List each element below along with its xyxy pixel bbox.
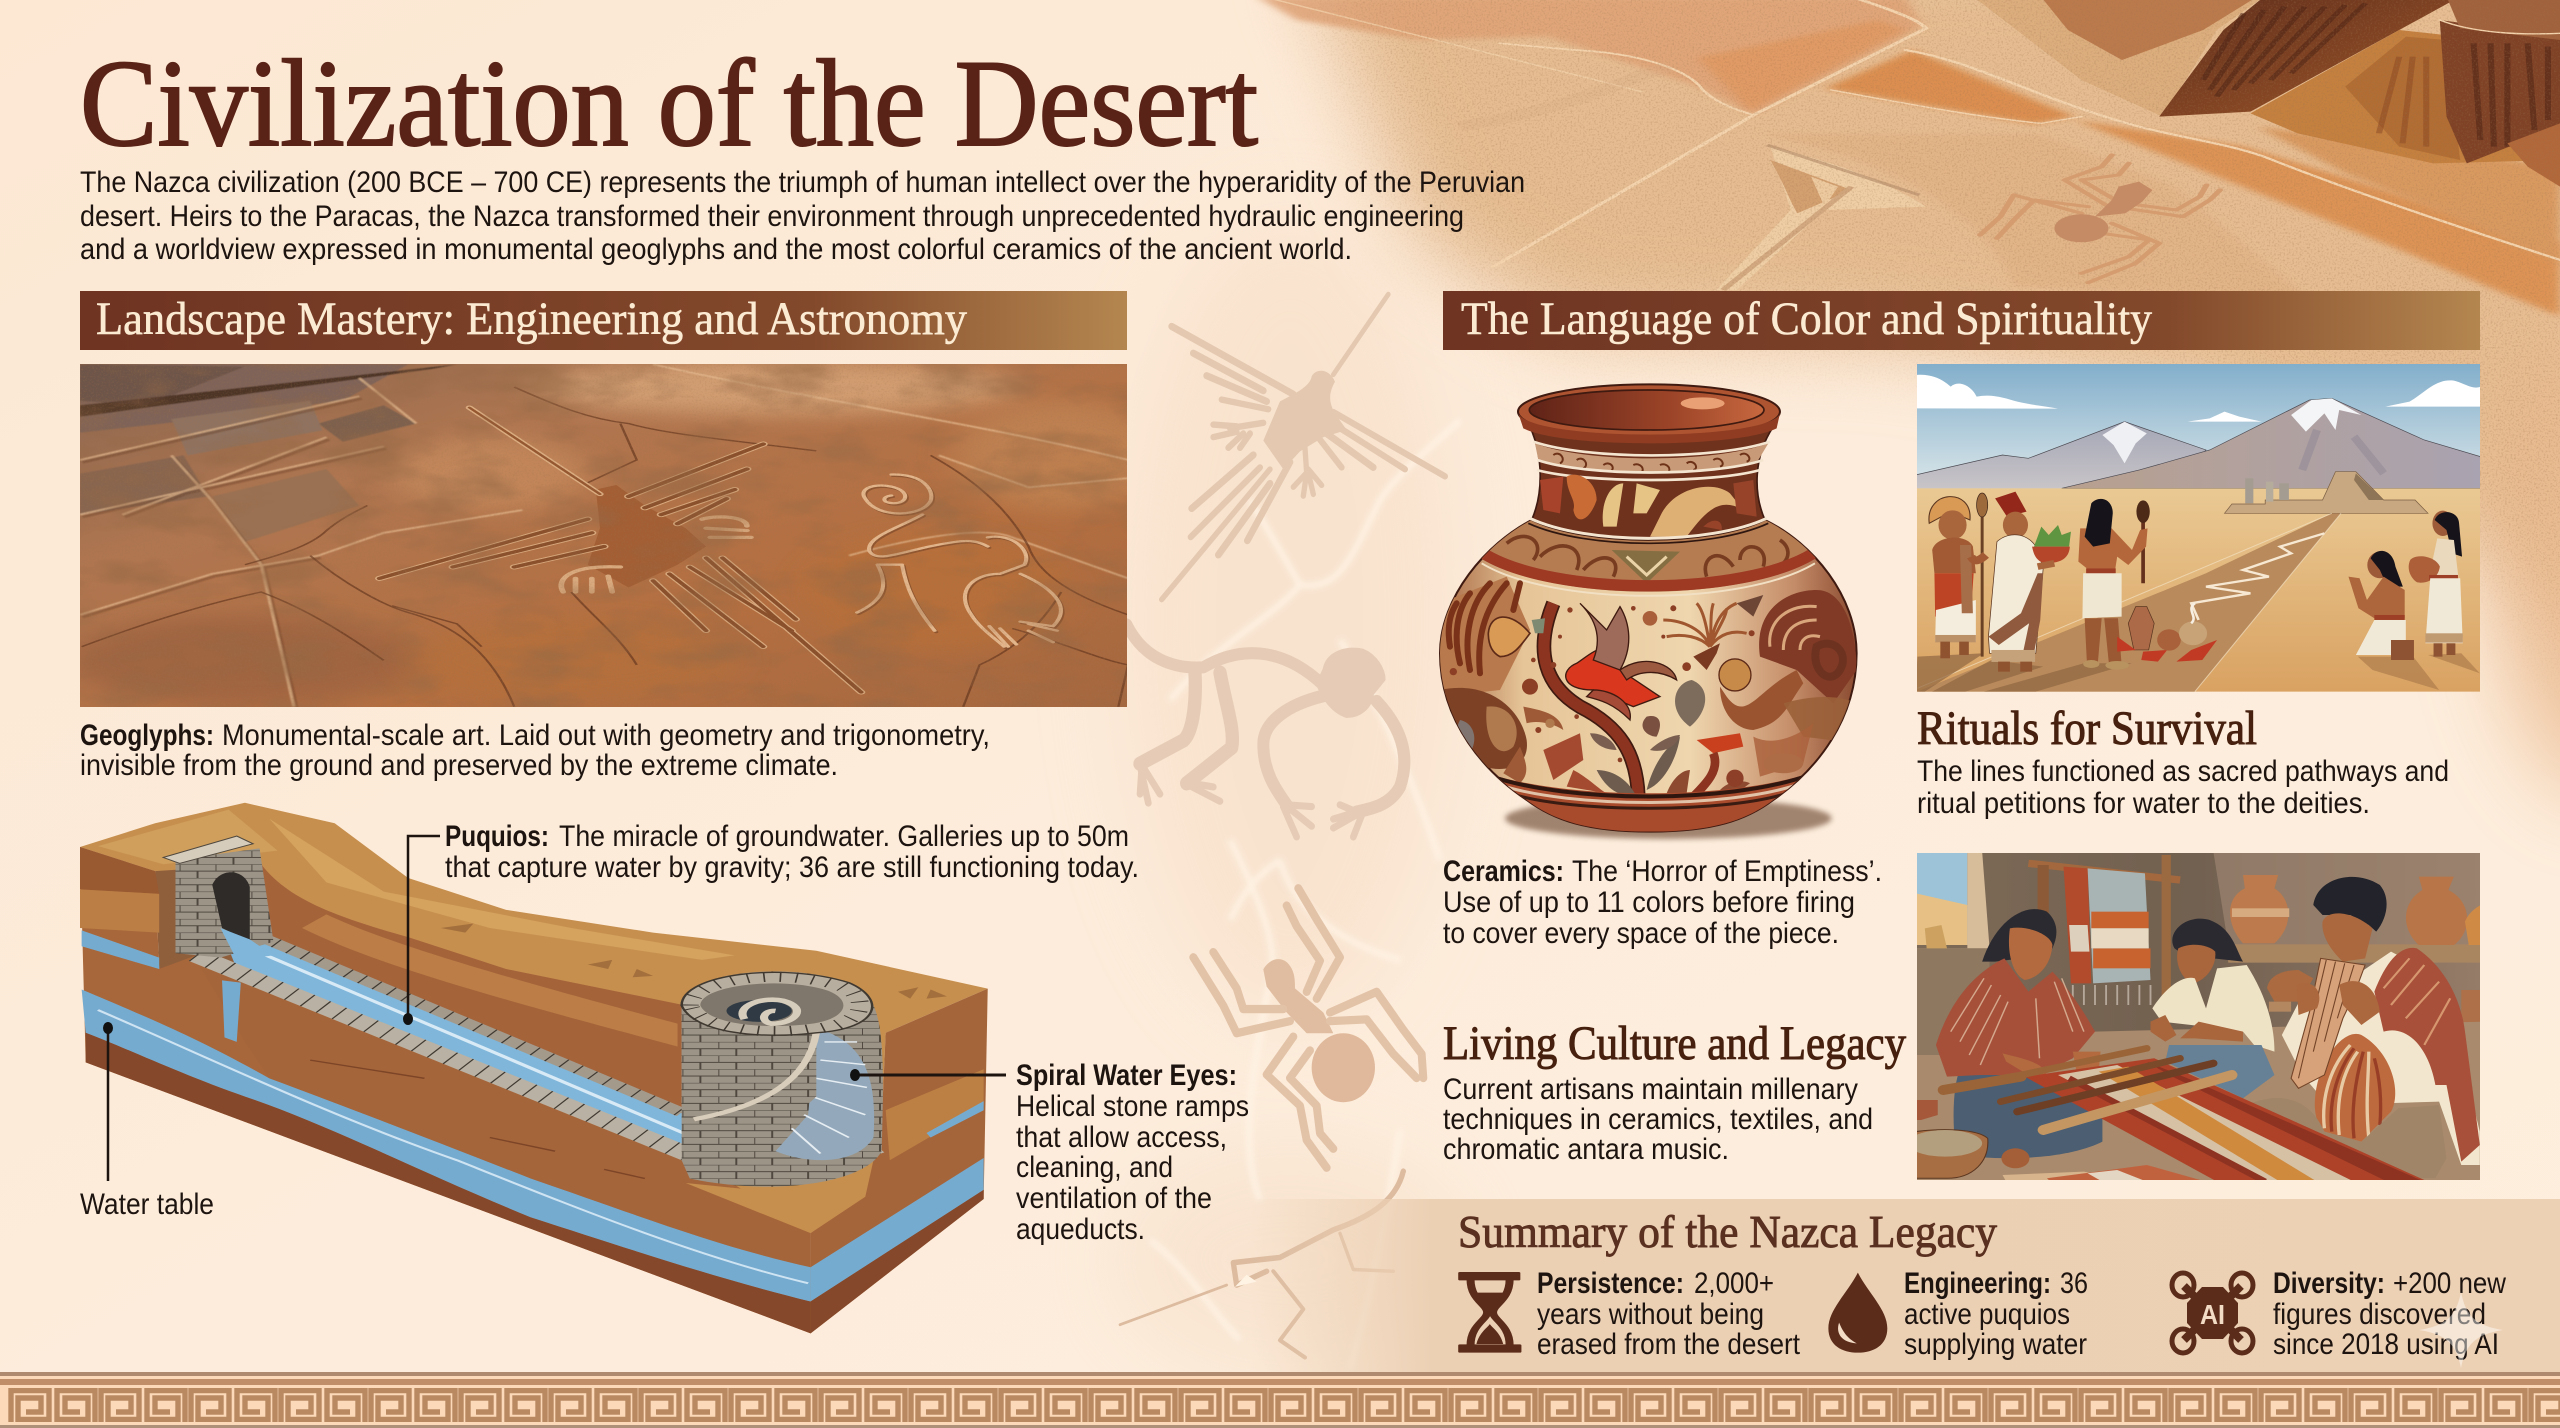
subheading and text: living culture: techniques in ceramics, textiles, and [1443,1103,1873,1136]
right soil face [811,989,988,1333]
panel: landscape mastery [65,291,1249,1333]
woman center [2150,919,2274,1098]
summary text: diversity: +200 new [2393,1267,2506,1300]
woman left [1936,909,2102,1168]
icon: AI: AI [2200,1299,2225,1330]
caption: ceramics: to cover every space of the piece. [1443,917,1839,950]
temple [2224,472,2428,513]
small painted motifs [1450,605,1755,762]
right creature [1759,590,1857,703]
background glyph: monkey [1127,625,1404,837]
callout: spiral water eyes: ventilation of the [1016,1182,1212,1215]
summary text: diversity [2273,1267,2506,1361]
floor rug [2002,1172,2139,1182]
summary text: engineering [1904,1267,2088,1361]
summary text: engineering: Engineering: [1904,1267,2051,1300]
foot band [1496,776,1803,832]
caption: ceramics: Use of up to 11 colors before firing [1443,886,1855,919]
stone channel walls [261,937,682,1112]
icon: sparkle watermark [2419,1292,2503,1368]
section heading: language of color: The Language of Color and Spirituality [1461,293,2152,345]
front soil face [80,847,811,1333]
caption: ceramics: Ceramics: [1443,855,1564,888]
summary text: persistence: 2,000+ [1694,1267,1774,1300]
icon: spider geoglyph on terrain [1980,155,2220,283]
subheading and text: living culture: Living Culture and Legacy [1443,1017,1906,1070]
image: ritual procession on the lines [1916,363,2482,692]
left creature [1440,577,1530,697]
caption: geoglyphs: Monumental-scale art. Laid out with geometry and trigonometry, [222,719,990,752]
subheading and text: rituals for survival [1917,702,2449,820]
loom sticks [1943,1048,2232,1130]
callout: water table [80,1022,214,1221]
image: artisans weaving and playing antara [1908,852,2482,1182]
callout: spiral water eyes: aqueducts. [1016,1213,1145,1246]
figure: man with raised club [2078,499,2150,670]
floor [1916,1022,2482,1182]
background: desert terrain, top right [1200,0,2560,800]
intro text: The Nazca civilization (200 BCE – 700 CE) represents the triumph of human intellect over the hyperaridity of the Peruvian [80,166,1525,199]
callout: puquios [403,820,1139,1025]
lower tan strata [686,1183,865,1233]
shelf with jars [2228,875,2482,1047]
summary text: persistence: years without being [1537,1298,1764,1331]
panel: summary of the Nazca legacy [1458,1206,2506,1368]
subheading and text: rituals for survival: The lines functioned as sacred pathways and [1917,755,2449,788]
section heading: language of color [1443,291,2480,350]
bowl and cup [1908,1100,1988,1178]
figure: priest with fan headdress [1929,493,1988,658]
title: Civilization of the Desert [80,35,1258,172]
icon: water drop [1828,1273,1887,1353]
summary heading: Summary of the Nazca Legacy [1458,1206,1997,1257]
spiral well [682,971,883,1187]
summary text: diversity: Diversity: [2273,1267,2385,1300]
subheading and text: rituals for survival: Rituals for Survival [1917,702,2257,755]
caption: geoglyphs: invisible from the ground and preserved by the extreme climate. [80,749,838,782]
caption: geoglyphs: Geoglyphs: [80,719,214,752]
central flower [1566,603,1677,720]
subheading and text: living culture [1443,1017,1906,1166]
top surface [80,803,988,1233]
subheading and text: living culture: Current artisans maintain millenary [1443,1073,1858,1106]
man with antara [2239,877,2480,1178]
icon: AI [2172,1273,2253,1353]
icon: hourglass [1458,1272,1521,1353]
shoulder band [1480,517,1817,592]
callout: water table: Water table [80,1188,214,1221]
subheading and text: rituals for survival: ritual petitions for water to the deities. [1917,787,2370,820]
diagram: puquio cross-section [80,803,988,1333]
background glyph: spider [1193,888,1423,1168]
intro text: desert. Heirs to the Paracas, the Nazca transformed their environment through unprecedented hydraulic engineering [80,200,1464,233]
summary text: persistence [1537,1267,1801,1361]
callout: spiral water eyes: that allow access, [1016,1121,1227,1154]
callout: puquios: Puquios: [445,820,549,853]
background: pale veins in center [1120,220,1460,1370]
intro text: and a worldview expressed in monumental geoglyphs and the most colorful ceramics of the ancient world. [80,233,1352,266]
summary text: diversity: since 2018 using AI [2273,1328,2499,1361]
figure: priest with offering bowl [1988,492,2071,672]
water table band [82,990,811,1301]
callout: puquios: that capture water by gravity; 36 are still functioning today. [445,851,1139,884]
rear wall of channel [261,864,686,1115]
callout: spiral water eyes: Helical stone ramps [1016,1090,1249,1123]
offerings [2117,603,2217,662]
caption: ceramics: The ‘Horror of Emptiness’. [1572,855,1882,888]
background glyph: hummingbird [1162,294,1445,600]
pot neck [1530,427,1773,540]
pot rim [1518,384,1780,439]
summary text: persistence: erased from the desert [1537,1328,1801,1361]
plants [1663,603,1747,647]
summary panel background [1250,1199,2560,1372]
subheading and text: living culture: chromatic antara music. [1443,1133,1729,1166]
caption: geoglyphs [80,719,990,782]
geoglyph: monkey [857,474,1063,648]
image: aerial view of hummingbird and monkey geoglyphs [65,360,1167,709]
callout: spiral water eyes: Spiral Water Eyes: [1016,1059,1237,1092]
summary text: engineering: 36 [2060,1267,2088,1300]
figure: standing woman with jar [2409,511,2463,657]
callout: puquios: The miracle of groundwater. Galleries up to 50m [559,820,1129,853]
water channel [220,928,816,1158]
decorative key border [0,1372,2560,1428]
figure: kneeling woman [2348,551,2414,660]
central stem [1544,603,1638,797]
background glyph: faded bird bottom [1120,1171,1403,1358]
callout: spiral water eyes [850,1059,1249,1246]
summary text: engineering: active puquios [1904,1298,2070,1331]
caption: ceramics [1443,855,1882,950]
summary text: diversity: figures discovered [2273,1298,2486,1331]
shadows [1916,653,2132,692]
tunnel entrance [176,848,273,958]
woven textile on floor [2025,1058,2428,1182]
panel: color and spirituality [0,291,2560,1428]
path [1917,513,2341,692]
intro text [80,166,1525,266]
geoglyph: hummingbird [380,408,861,692]
image: painted Nazca ceramic pot [1440,384,1857,839]
loom with hanging textile [2028,855,2180,1005]
callout: spiral water eyes: cleaning, and [1016,1151,1173,1184]
summary text: persistence: Persistence: [1537,1267,1684,1300]
cut wall behind tunnel [155,864,273,992]
summary text: engineering: supplying water [1904,1328,2087,1361]
section heading: landscape mastery: Landscape Mastery: Engineering and Astronomy [96,293,967,345]
